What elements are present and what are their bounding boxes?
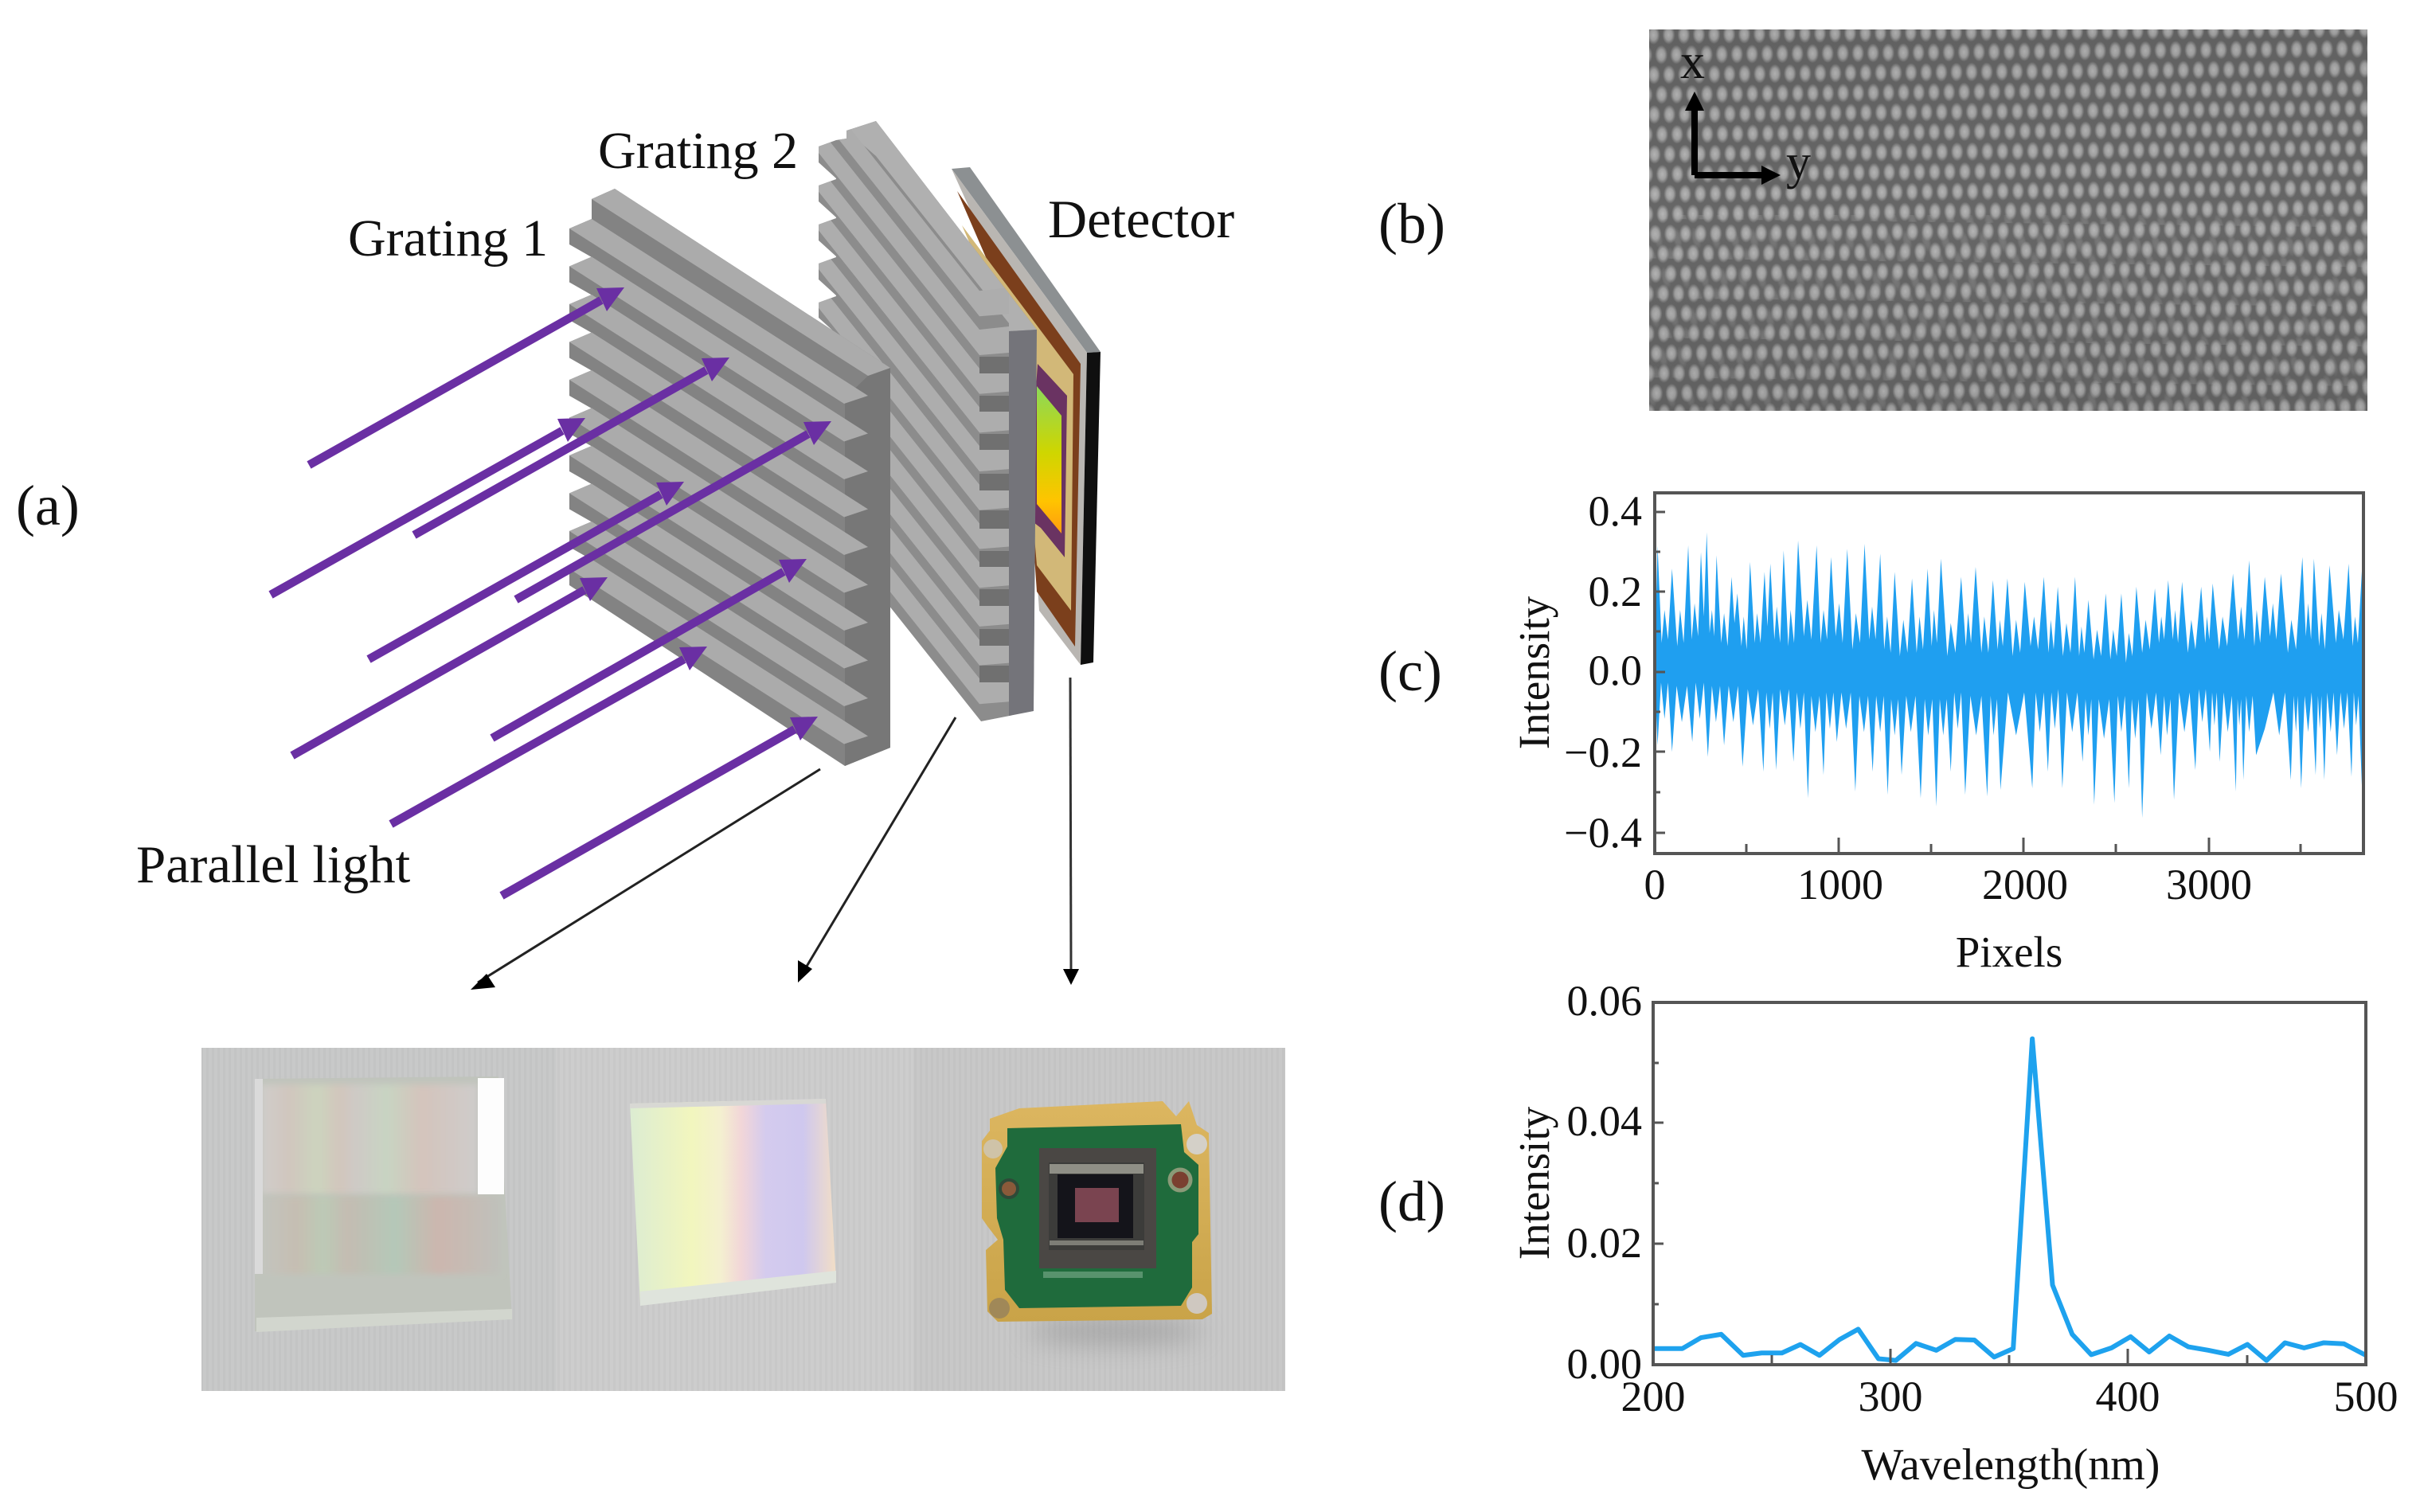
arrow: detector to photo [1063, 678, 1079, 985]
y tick labels: 0.02 [1567, 1219, 1642, 1267]
x tick labels: 400 [2096, 1373, 2160, 1420]
photo: grating 2 sample [630, 1099, 836, 1306]
y tick labels: 0.0 [1588, 647, 1642, 694]
label: (d): (d) [1378, 1170, 1445, 1233]
y tick labels: −0.4 [1564, 809, 1642, 857]
series: intensity trace [1655, 532, 2362, 818]
x tick labels: 3000 [2166, 861, 2252, 908]
x tick labels: 0 [1644, 861, 1666, 908]
y tick labels: 0.04 [1567, 1097, 1642, 1145]
photo strip: gratings and detector [201, 1048, 1285, 1391]
y tick labels [1567, 977, 1642, 1388]
axis title: Intensity: Intensity [1510, 1106, 1558, 1260]
label: Grating 2: Grating 2 [598, 122, 798, 180]
arrow: grating 1 to photo [471, 769, 820, 990]
axis title: Intensity: Intensity [1510, 596, 1558, 749]
panel: (d) intensity vs wavelength chart [1378, 977, 2398, 1490]
icon: grating 1 [569, 189, 890, 766]
x tick labels: 2000 [1982, 861, 2068, 908]
image: moire fringes [1649, 29, 2367, 411]
icon: grating 2 [819, 88, 1037, 721]
icon: detector [952, 167, 1101, 665]
arrow: grating 2 to photo [798, 717, 956, 983]
y tick labels: −0.2 [1564, 729, 1642, 776]
panel: (a) optical setup [16, 88, 1285, 1391]
x tick labels: 200 [1621, 1373, 1685, 1420]
series: spectrum line [1653, 1039, 2366, 1361]
axes frame and ticks [1653, 1002, 2366, 1365]
axis title: Pixels: Pixels [1956, 928, 2062, 976]
axes frame and ticks [1655, 493, 2363, 854]
y tick labels: 0.06 [1567, 977, 1642, 1025]
x tick labels [1621, 1373, 2398, 1420]
y tick labels: 0.00 [1567, 1340, 1642, 1388]
x tick labels: 300 [1859, 1373, 1922, 1420]
photo: detector board [982, 1101, 1212, 1344]
icon: xy axes: x [1680, 35, 1705, 89]
panel: (c) intensity vs pixels chart [1378, 487, 2363, 976]
label: Parallel light: Parallel light [136, 835, 411, 894]
photo: grating 1 sample [255, 1076, 512, 1332]
icon: xy axes: y [1786, 135, 1811, 189]
label: (c): (c) [1378, 639, 1442, 703]
label: Detector: Detector [1048, 189, 1234, 249]
icon: xy axes [1680, 35, 1811, 189]
axis title: Wavelength(nm): Wavelength(nm) [1862, 1440, 2160, 1490]
y tick labels [1564, 487, 1642, 857]
arrows: parallel light [271, 287, 831, 896]
y tick labels: 0.2 [1588, 568, 1642, 615]
label: (b): (b) [1378, 192, 1445, 256]
y tick labels: 0.4 [1588, 487, 1642, 535]
x tick labels: 500 [2333, 1373, 2398, 1420]
x tick labels: 1000 [1797, 861, 1883, 908]
x tick labels [1644, 861, 2252, 908]
label: (a): (a) [16, 474, 80, 537]
label: Grating 1: Grating 1 [348, 209, 548, 268]
panel: (b) moire image [1378, 29, 2367, 411]
